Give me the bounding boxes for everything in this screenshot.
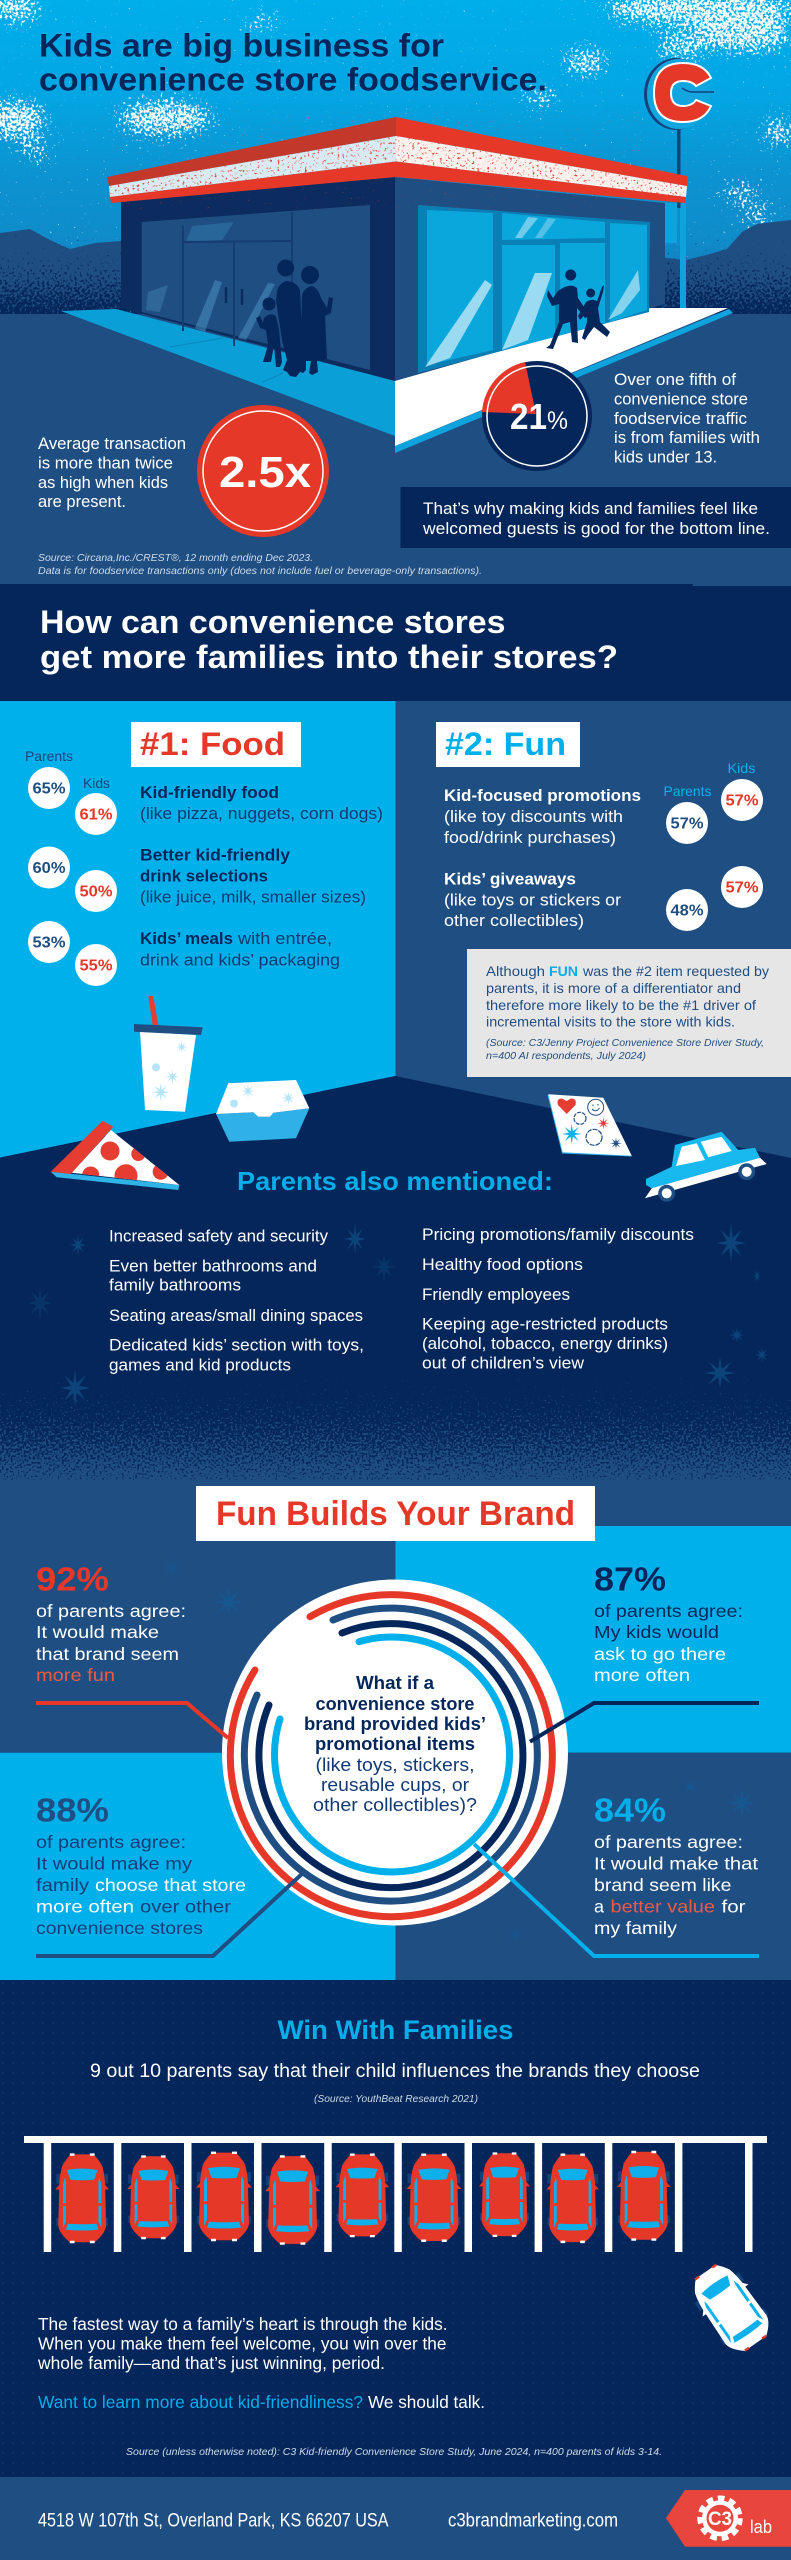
clouds bbox=[0, 0, 791, 225]
hills bbox=[0, 220, 791, 316]
panel: win with families bbox=[0, 1980, 791, 2477]
list: parents mentioned right: (alcohol, tobacco, energy drinks) bbox=[422, 1334, 668, 1353]
callout: fun differentiator: incremental visits to the store with kids. bbox=[486, 1014, 735, 1030]
connector: 87% bbox=[530, 1703, 759, 1742]
stat: 2.5x circle bbox=[197, 405, 329, 537]
legend labels: Kids bbox=[83, 775, 110, 791]
stat: 87% ask to go: more often bbox=[594, 1665, 690, 1685]
callout: bottom line bbox=[400, 487, 791, 548]
stat: 88% choose that store bbox=[36, 1792, 246, 1938]
callout: bottom line: welcomed guests is good for the bottom line. bbox=[422, 519, 770, 538]
text: closing message: The fastest way to a family’s heart is through the kids. bbox=[38, 2314, 448, 2334]
stat: 87% ask to go: My kids would bbox=[594, 1622, 719, 1642]
percent badges: food: 60% bbox=[32, 860, 66, 877]
percent badges: food: 53% bbox=[32, 934, 66, 952]
percent badges: food bbox=[28, 767, 117, 986]
panel: left food background bbox=[0, 701, 396, 1161]
list: parents mentioned right bbox=[422, 1225, 694, 1372]
stat: 88% choose that store: of parents agree: bbox=[36, 1832, 186, 1852]
source note bbox=[38, 552, 482, 577]
stat: 87% ask to go: ask to go there bbox=[594, 1644, 726, 1664]
callout: fun differentiator: (Source: C3/Jenny Project Convenience Store Driver Study, bbox=[486, 1037, 764, 1049]
text: fun items: (like toys or stickers or bbox=[444, 890, 621, 910]
text: food items bbox=[140, 783, 383, 970]
icon: sticker sheet bbox=[548, 1094, 632, 1156]
text: one fifth of traffic bbox=[614, 370, 760, 466]
source note: Data is for foodservice transactions only (does not include fuel or beverage-only transactions). bbox=[38, 565, 482, 577]
stat: 92% more fun: of parents agree: bbox=[36, 1601, 186, 1621]
store sign bbox=[644, 58, 714, 309]
text: center question: convenience store bbox=[316, 1694, 474, 1714]
text: center question: What if a bbox=[356, 1673, 435, 1693]
panel: right fun background bbox=[396, 701, 791, 1161]
stat: 84% better value: my family bbox=[594, 1918, 677, 1938]
list: parents mentioned left: Seating areas/small dining spaces bbox=[109, 1306, 363, 1325]
store left wall bbox=[121, 177, 395, 381]
callout: fun differentiator: Although bbox=[486, 963, 545, 979]
heading: fun builds your brand: Fun Builds Your Brand bbox=[216, 1495, 575, 1533]
store right wall bbox=[395, 177, 665, 381]
text: food items: drink selections bbox=[140, 866, 268, 886]
store roof band bbox=[107, 117, 687, 203]
stat: 84% better value: of parents agree: bbox=[594, 1832, 743, 1852]
list: parents mentioned left: Even better bathrooms and bbox=[109, 1256, 317, 1276]
list: parents mentioned left: games and kid products bbox=[109, 1356, 291, 1374]
text: center question: reusable cups, or bbox=[321, 1775, 469, 1795]
heading: #2 Fun bbox=[436, 722, 580, 767]
list: parents mentioned right: Friendly employees bbox=[422, 1285, 570, 1304]
heading: #1 Food: #1: Food bbox=[140, 726, 285, 762]
stat: 87% ask to go bbox=[594, 1560, 743, 1685]
stat: 2.5x circle: 2.5x bbox=[219, 448, 312, 497]
source note: (Source: YouthBeat Research 2021) bbox=[314, 2093, 478, 2105]
icon: pizza slice bbox=[51, 1121, 179, 1190]
panel: section heading bbox=[0, 584, 693, 701]
stat: 88% choose that store: choose that store bbox=[95, 1875, 246, 1895]
background stars bbox=[27, 1224, 769, 1406]
source note: Source (unless otherwise noted): C3 Kid-friendly Convenience Store Study, June 2024, n=400 parents of kids 3-14. bbox=[126, 2446, 662, 2458]
icon: drink cup bbox=[134, 996, 203, 1112]
text: fun items: food/drink purchases) bbox=[444, 828, 616, 847]
heading: win with families: Win With Families bbox=[278, 2015, 514, 2045]
text: average transaction: are present. bbox=[38, 492, 126, 511]
text: food items: Kid-friendly food bbox=[140, 783, 279, 802]
stat: 87% ask to go: of parents agree: bbox=[594, 1601, 743, 1621]
list: parents mentioned left: Dedicated kids’ section with toys, bbox=[109, 1336, 364, 1354]
list: parents mentioned right: Pricing promotions/family discounts bbox=[422, 1225, 694, 1244]
connector: 88% bbox=[36, 1873, 303, 1956]
stat: 84% better value: for bbox=[722, 1896, 746, 1916]
stat: 92% more fun: more fun bbox=[36, 1665, 115, 1685]
subheading: 9 out 10 parents say that their child influences the brands they choose bbox=[90, 2061, 700, 2082]
ground bbox=[0, 314, 791, 586]
percent badges: fun bbox=[666, 779, 763, 931]
stat: 88% choose that store: 88% bbox=[36, 1792, 109, 1828]
speckled fade bbox=[0, 1385, 791, 1480]
legend labels bbox=[664, 760, 756, 799]
list: parents mentioned right: Keeping age-restricted products bbox=[422, 1314, 668, 1334]
percent badges: fun: 57% bbox=[726, 880, 758, 896]
text: one fifth of traffic: kids under 13. bbox=[614, 448, 717, 466]
panel: navy lower band bbox=[0, 1076, 791, 1480]
stat: 88% choose that store: more often bbox=[36, 1896, 134, 1916]
stat: 84% better value: brand seem like bbox=[594, 1875, 732, 1895]
legend labels bbox=[25, 748, 110, 791]
source note: Source: Circana,Inc./CREST®, 12 month ending Dec 2023. bbox=[38, 552, 313, 564]
percent badges: fun: 57% bbox=[670, 816, 704, 832]
heading: parents also mentioned: Parents also mentioned: bbox=[237, 1166, 553, 1196]
callout: fun differentiator: FUN bbox=[549, 963, 578, 979]
text: average transaction bbox=[38, 434, 186, 511]
text: fun items: Kids’ giveaways bbox=[444, 870, 576, 888]
text: closing message: whole family—and that’s just winning, period. bbox=[37, 2353, 385, 2373]
logo: C3 lab: C3 bbox=[708, 2509, 732, 2530]
stat: 21% pie: % bbox=[547, 407, 568, 435]
list: parents mentioned right: Healthy food options bbox=[422, 1255, 583, 1274]
stat: 21% pie bbox=[482, 361, 592, 471]
text: food items: (like pizza, nuggets, corn dogs) bbox=[140, 804, 383, 823]
percent badges: fun: 57% bbox=[726, 792, 758, 810]
heading: fun builds your brand bbox=[196, 1486, 595, 1541]
list: parents mentioned left bbox=[109, 1226, 364, 1374]
connector: 84% bbox=[474, 1844, 759, 1956]
text: center question: brand provided kids’ bbox=[304, 1714, 486, 1734]
chart: parking lot of nine cars bbox=[24, 2136, 767, 2252]
text: center question bbox=[304, 1673, 486, 1815]
text: closing message: When you make them feel welcome, you win over the bbox=[38, 2334, 446, 2354]
panel: section heading: How can convenience stores bbox=[40, 604, 506, 640]
title: Kids are big business for bbox=[39, 28, 444, 64]
stat: 87% ask to go: 87% bbox=[594, 1560, 666, 1598]
left sidewalk bbox=[61, 309, 395, 436]
callout: fun differentiator: n=400 AI respondents, July 2024) bbox=[486, 1050, 646, 1062]
footer website: c3brandmarketing.com bbox=[448, 2510, 618, 2532]
text: food items: with entrée, bbox=[237, 929, 332, 948]
heading: #1 Food bbox=[131, 722, 301, 767]
percent badges: food: 65% bbox=[32, 780, 66, 798]
text: one fifth of traffic: foodservice traffic bbox=[614, 409, 747, 428]
callout: fun differentiator: was the #2 item requested by bbox=[582, 963, 769, 979]
text: average transaction: as high when kids bbox=[38, 473, 168, 492]
text: closing message bbox=[37, 2314, 447, 2373]
stat: 88% choose that store: family bbox=[36, 1875, 89, 1895]
title: convenience store foodservice. bbox=[39, 62, 547, 98]
text: center question: promotional items bbox=[315, 1734, 475, 1754]
stat: 88% choose that store: over other bbox=[140, 1896, 231, 1916]
text: fun items: (like toy discounts with bbox=[444, 807, 623, 826]
text: average transaction: Average transaction bbox=[38, 434, 186, 453]
silhouettes: family at left window bbox=[256, 260, 333, 377]
panel: #2 fun bbox=[436, 722, 791, 1077]
panel: fun builds your brand bbox=[0, 1480, 791, 1980]
callout: fun differentiator: therefore more likely to be the #1 driver of bbox=[486, 997, 756, 1013]
icon: blue car bbox=[645, 1132, 767, 1202]
stat: 88% choose that store: It would make my bbox=[36, 1854, 192, 1874]
text: average transaction: is more than twice bbox=[38, 454, 173, 472]
connector: 92% bbox=[36, 1703, 228, 1738]
footer bbox=[0, 2477, 791, 2560]
text: center question: (like toys, stickers, bbox=[316, 1755, 474, 1775]
list: parents mentioned right: out of children’s view bbox=[422, 1354, 585, 1372]
percent badges: food: 55% bbox=[80, 958, 112, 974]
stat: 84% better value: better value bbox=[610, 1896, 715, 1916]
text: food items: Better kid-friendly bbox=[140, 846, 291, 864]
text: fun items bbox=[444, 786, 641, 930]
callout: bottom line: That’s why making kids and families feel like bbox=[423, 499, 758, 518]
list: parents mentioned left: Increased safety and security bbox=[109, 1226, 328, 1246]
icon: food clamshell box bbox=[216, 1080, 309, 1142]
title bbox=[39, 28, 547, 98]
panel: store hero bbox=[0, 0, 791, 586]
percent badges: fun: 48% bbox=[670, 902, 704, 920]
quadrant backgrounds bbox=[0, 1480, 791, 1980]
percent badges: food: 50% bbox=[80, 884, 112, 900]
panel: #1 food bbox=[25, 722, 383, 986]
text: food items: Kids’ meals bbox=[140, 929, 233, 948]
stat: 21% pie: 21 bbox=[510, 396, 547, 437]
text: center question: other collectibles)? bbox=[313, 1795, 477, 1815]
right sidewalk bbox=[395, 308, 733, 453]
logo: C3 lab: lab bbox=[750, 2517, 772, 2537]
stat: 84% better value bbox=[594, 1792, 758, 1938]
panel: section heading: get more families into their stores? bbox=[40, 639, 618, 675]
stat: 92% more fun bbox=[36, 1560, 186, 1685]
percent badges: food: 61% bbox=[80, 806, 112, 824]
stat: 84% better value: It would make that bbox=[594, 1854, 758, 1874]
stat: 84% better value: a bbox=[594, 1896, 604, 1916]
horizon shading bbox=[0, 250, 791, 314]
list: parents mentioned left: family bathrooms bbox=[109, 1276, 241, 1294]
chart: radial arcs bbox=[222, 1580, 568, 1926]
stat: 92% more fun: 92% bbox=[36, 1560, 109, 1598]
legend labels: Parents bbox=[25, 748, 73, 764]
text: food items: (like juice, milk, smaller sizes) bbox=[140, 888, 366, 906]
stat: 92% more fun: that brand seem bbox=[36, 1644, 179, 1664]
legend labels: Kids bbox=[728, 760, 756, 776]
sky background bbox=[0, 0, 791, 316]
text: one fifth of traffic: is from families with bbox=[614, 428, 760, 447]
text: one fifth of traffic: convenience store bbox=[614, 390, 748, 408]
text: one fifth of traffic: Over one fifth of bbox=[614, 370, 736, 389]
legend labels: Parents bbox=[664, 783, 712, 799]
background stars bbox=[162, 1555, 756, 1943]
callout: fun differentiator: parents, it is more of a differentiator and bbox=[486, 980, 741, 996]
stat: 88% choose that store: convenience stores bbox=[36, 1918, 203, 1938]
text: fun items: Kid-focused promotions bbox=[444, 786, 641, 805]
icon: white car arriving bbox=[682, 2255, 779, 2360]
stat: 92% more fun: It would make bbox=[36, 1622, 159, 1642]
stat: 84% better value: 84% bbox=[594, 1792, 666, 1828]
text: fun items: other collectibles) bbox=[444, 911, 584, 930]
heading: #2 Fun: #2: Fun bbox=[445, 726, 566, 762]
silhouettes: family at right window bbox=[546, 270, 610, 349]
text: call to action: We should talk. bbox=[368, 2392, 485, 2412]
footer address: 4518 W 107th St, Overland Park, KS 66207 USA bbox=[38, 2510, 389, 2532]
callout: fun differentiator bbox=[467, 949, 791, 1077]
logo: C3 lab bbox=[666, 2490, 791, 2547]
text: food items: drink and kids’ packaging bbox=[140, 950, 340, 970]
text: call to action: Want to learn more about kid-friendliness? bbox=[38, 2392, 363, 2412]
